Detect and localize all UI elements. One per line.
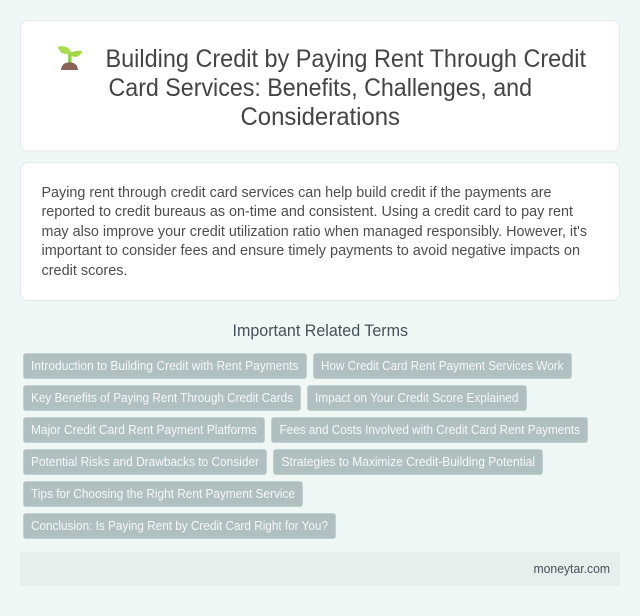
heading: title bbox=[106, 45, 586, 131]
footer: source: moneytar.com bbox=[534, 561, 610, 576]
tag: strategies bbox=[274, 450, 542, 474]
tag: choosing a service bbox=[24, 482, 302, 506]
tag: introduction bbox=[24, 354, 306, 378]
heading: title: Considerations bbox=[240, 103, 400, 131]
tag: risks and drawbacks bbox=[24, 450, 266, 474]
tag: credit score impact bbox=[308, 386, 526, 410]
tag: introduction: Introduction to Building Credit with Rent Payments bbox=[31, 358, 299, 373]
text block: summary: credit scores. bbox=[42, 263, 128, 279]
tag: conclusion bbox=[24, 514, 336, 538]
tag: fees and costs: Fees and Costs Involved with Credit Card Rent Payments bbox=[280, 422, 580, 437]
tag: choosing a service: Tips for Choosing the Right Rent Payment Service bbox=[31, 486, 295, 501]
icon: sprout bbox=[58, 46, 82, 70]
text block: summary: may also improve your credit utilization ratio when managed responsibly. However, it's bbox=[42, 224, 587, 240]
tag: credit score impact: Impact on Your Credit Score Explained bbox=[315, 390, 518, 405]
tag: fees and costs bbox=[272, 418, 588, 442]
text block: summary bbox=[42, 185, 587, 279]
heading: title: Card Services: Benefits, Challenges, and bbox=[108, 74, 532, 102]
tag: key benefits: Key Benefits of Paying Rent Through Credit Cards bbox=[31, 390, 293, 405]
tag: strategies: Strategies to Maximize Credit-Building Potential bbox=[282, 454, 535, 469]
tag: major platforms bbox=[24, 418, 264, 442]
heading: important related terms: Important Related Terms bbox=[232, 322, 408, 340]
text block: summary: important to consider fees and ensure timely payments to avoid negative impacts on bbox=[42, 243, 580, 259]
panel: related term tags bbox=[24, 354, 588, 538]
footer: source bbox=[20, 552, 620, 586]
tag: conclusion: Conclusion: Is Paying Rent by Credit Card Right for You? bbox=[31, 518, 328, 533]
tag: key benefits bbox=[24, 386, 300, 410]
text block: summary: Paying rent through credit card services can help build credit if the payments are bbox=[42, 185, 552, 201]
tag: how services work: How Credit Card Rent Payment Services Work bbox=[321, 358, 564, 373]
tag: how services work bbox=[314, 354, 572, 378]
tag: risks and drawbacks: Potential Risks and Drawbacks to Consider bbox=[31, 454, 260, 469]
text block: summary: reported to credit bureaus as on-time and consistent. Using a credit card to pay rent bbox=[42, 204, 574, 220]
tag: major platforms: Major Credit Card Rent Payment Platforms bbox=[31, 422, 257, 437]
heading: title: Building Credit by Paying Rent Through Credit bbox=[106, 45, 586, 73]
panel: title card bbox=[20, 20, 620, 151]
panel: summary card bbox=[20, 162, 620, 300]
